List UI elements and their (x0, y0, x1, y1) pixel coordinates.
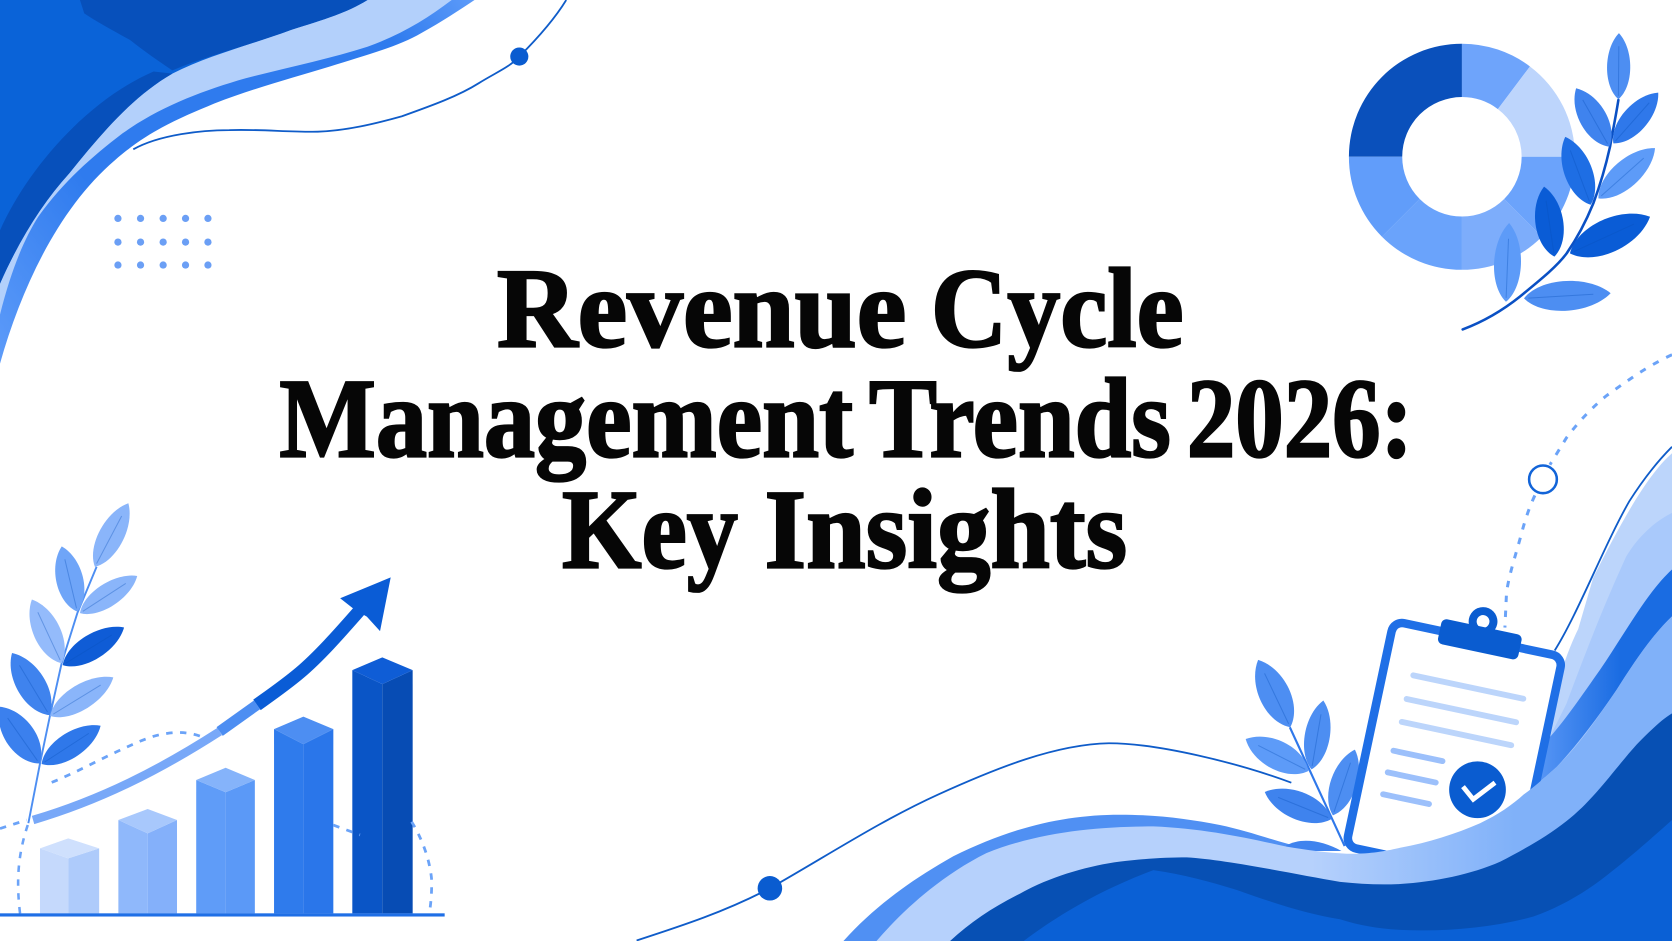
right dashed path with ring (1505, 355, 1672, 628)
bottom curved line with node (637, 743, 1291, 941)
small leaf sprig by clipboard (1239, 653, 1367, 846)
top-right leaf sprig (1463, 33, 1668, 329)
bar chart (0, 657, 445, 917)
dashed orbit lines around chart (0, 732, 432, 913)
clipboard icon (1346, 589, 1569, 882)
left leaf sprig (0, 497, 144, 913)
title: Insights (765, 467, 1127, 592)
title: Key (562, 467, 738, 592)
top-left curved line with node (133, 0, 566, 149)
title: Revenue (497, 247, 906, 372)
bottom-right back waves (1536, 447, 1672, 810)
dot grid (114, 215, 212, 269)
donut chart (1349, 44, 1575, 270)
check badge (1449, 761, 1506, 818)
title: Cycle (931, 247, 1184, 372)
top-left wave decoration (0, 0, 475, 364)
title: Management (279, 356, 853, 481)
bottom-right front waves (843, 616, 1672, 941)
growth arrow (33, 577, 391, 820)
title (279, 247, 1413, 592)
title: Trends (869, 356, 1171, 481)
title: 2026: (1187, 356, 1413, 481)
